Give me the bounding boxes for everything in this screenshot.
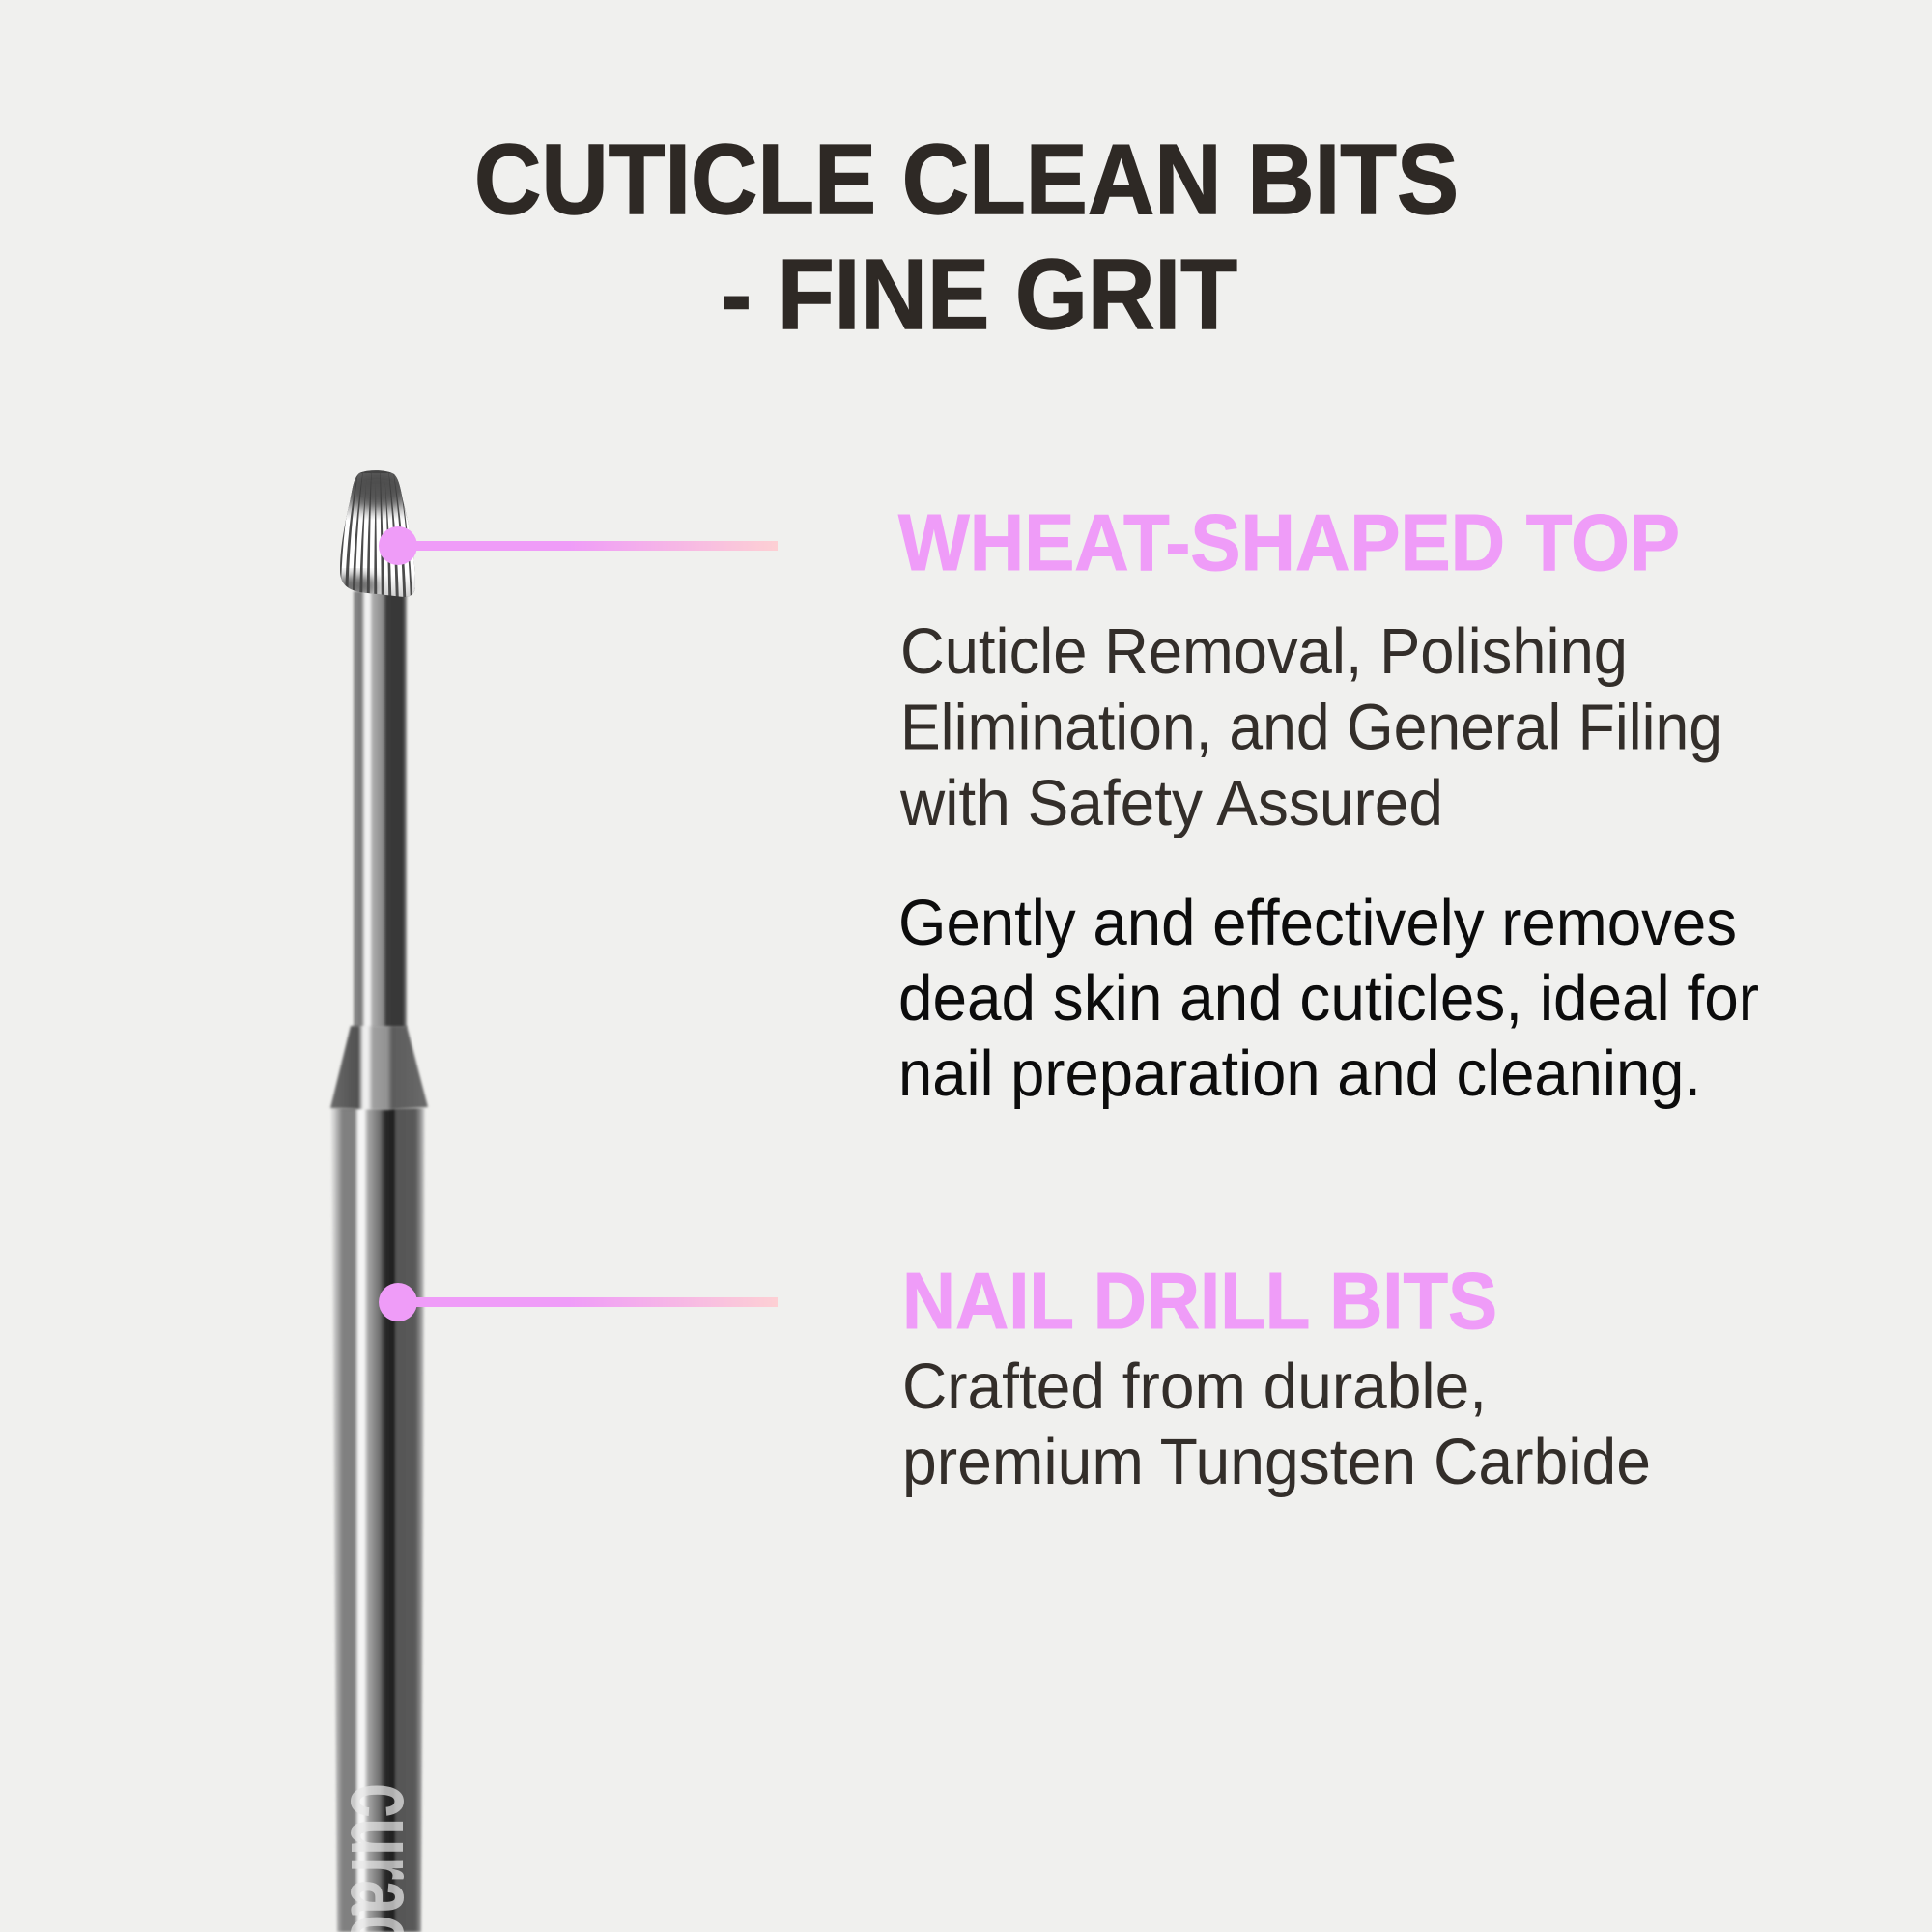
title: CUTICLE CLEAN BITS xyxy=(474,124,1459,235)
text block: material: premium Tungsten Carbide xyxy=(902,1426,1651,1498)
dark cap of burr xyxy=(344,469,410,508)
heading: wheat-shaped top: WHEAT-SHAPED TOP xyxy=(898,497,1680,587)
bit cone xyxy=(330,1026,428,1110)
bit head: wheat-shaped burr xyxy=(340,470,415,597)
text block: uses: Elimination, and General Filing xyxy=(900,692,1722,763)
callout line: wheat-shaped top xyxy=(379,526,778,565)
text block: description xyxy=(898,887,1759,1110)
text block: uses: Cuticle Removal, Polishing xyxy=(900,615,1628,688)
title: - FINE GRIT xyxy=(721,239,1237,350)
text block: uses: with Safety Assured xyxy=(899,767,1443,839)
text block: uses xyxy=(899,615,1722,839)
callout line: nail drill bits xyxy=(379,1283,778,1321)
dark base of burr xyxy=(332,575,379,596)
bit shank xyxy=(331,1108,425,1932)
product image: nail drill bit xyxy=(330,464,439,1932)
title xyxy=(474,124,1459,350)
text block: description: dead skin and cuticles, ideal for xyxy=(898,962,1759,1035)
text block: description: nail preparation and cleaning. xyxy=(898,1037,1701,1110)
text block: material: Crafted from durable, xyxy=(902,1350,1487,1423)
infographic canvas xyxy=(328,143,1758,1932)
bit neck xyxy=(354,591,407,1028)
text block: description: Gently and effectively removes xyxy=(898,887,1737,959)
text block: material xyxy=(902,1350,1651,1498)
heading: nail drill bits: NAIL DRILL BITS xyxy=(902,1256,1497,1346)
